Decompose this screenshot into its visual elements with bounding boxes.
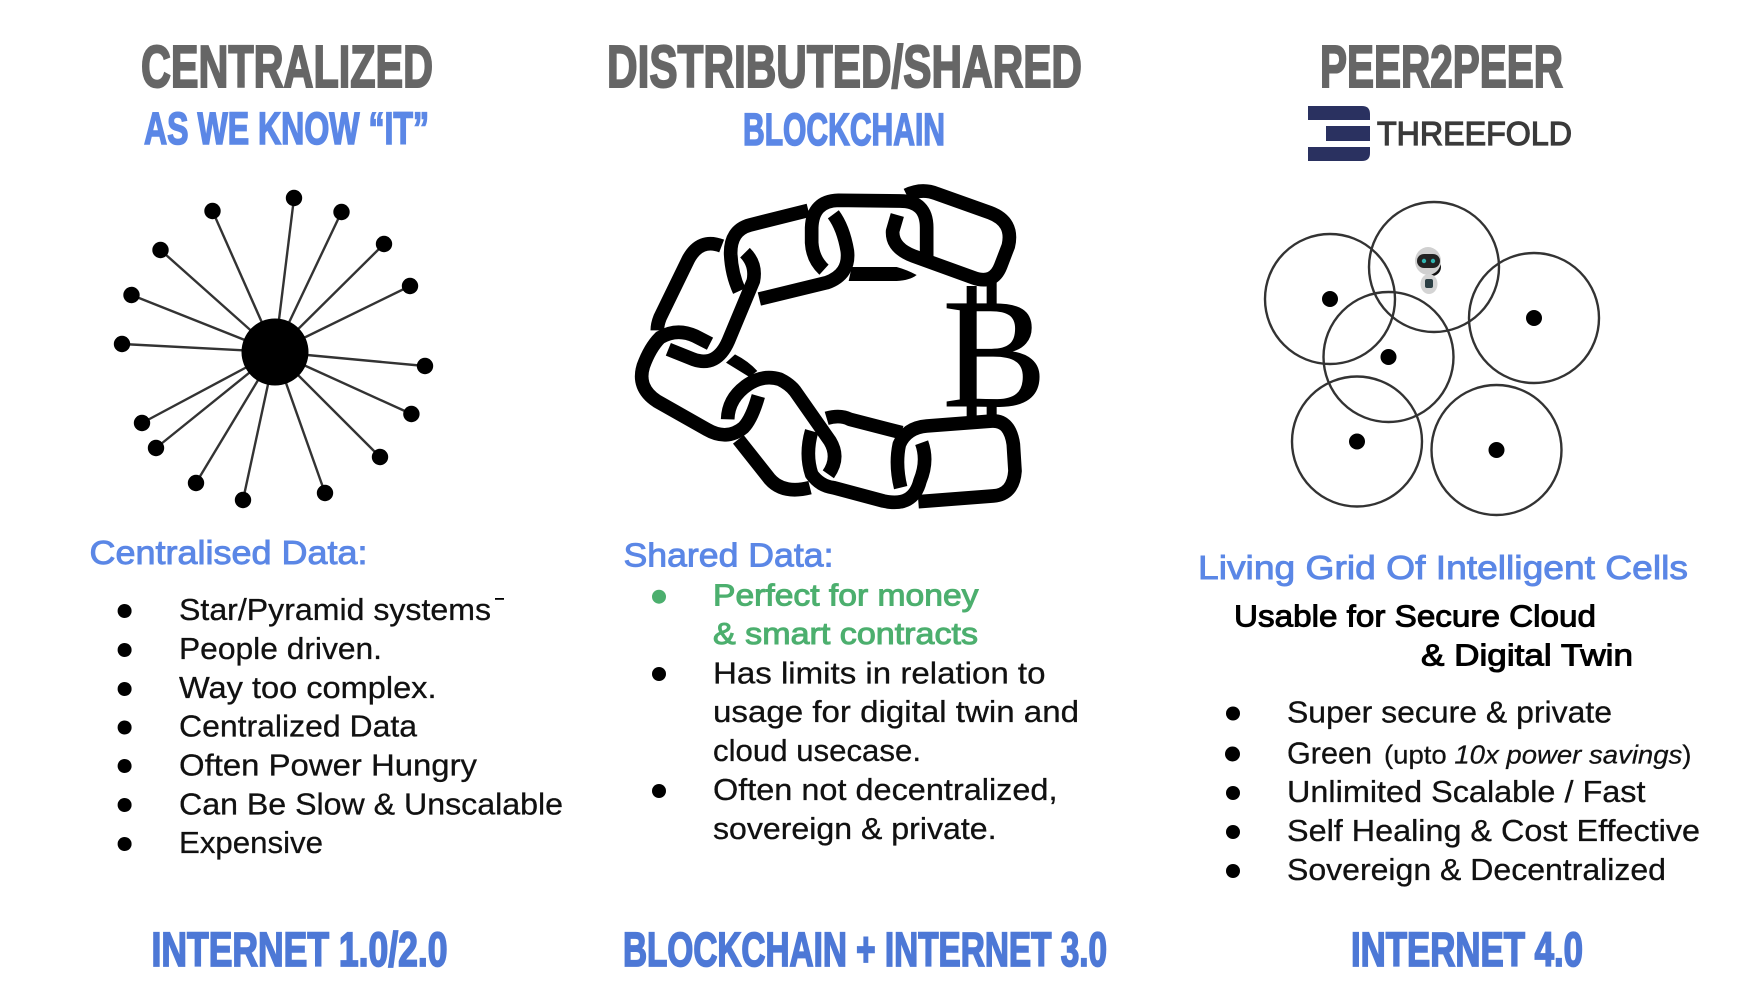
bullet list: centralised data: Star/Pyramid systems — [179, 592, 491, 627]
heading: centralized: CENTRALIZED — [141, 34, 433, 100]
bullet list: peer2peer benefits: Green — [1287, 736, 1372, 770]
bullet list: shared data: Has limits in relation to — [713, 656, 1046, 690]
section heading: shared data: Shared Data: — [624, 536, 834, 574]
bullet list: centralised data: People driven. — [179, 631, 382, 666]
bullet list: centralised data: Often Power Hungry — [179, 748, 478, 782]
bullet list: peer2peer benefits — [1225, 694, 1700, 887]
panel: distributed/shared — [607, 34, 1107, 977]
callout: usable for secure cloud and digital twin — [1234, 598, 1633, 672]
section heading: centralised data: Centralised Data: — [90, 534, 368, 571]
icon: robot digital twin — [1415, 247, 1441, 294]
section heading: living grid: Living Grid Of Intelligent Cells — [1198, 549, 1688, 586]
callout: usable for secure cloud and digital twin: Usable for Secure Cloud — [1234, 598, 1596, 634]
bullet list: centralised data — [118, 592, 563, 860]
bullet list: shared data — [652, 578, 1079, 846]
heading: distributed/shared: DISTRIBUTED/SHARED — [607, 34, 1082, 100]
panel: centralized — [90, 34, 563, 977]
callout: usable for secure cloud and digital twin: & Digital Twin — [1421, 638, 1633, 672]
bullet list: shared data: Often not decentralized, — [713, 772, 1058, 807]
bullet list: peer2peer benefits: Super secure & private — [1287, 694, 1612, 730]
bullet list: shared data: & smart contracts — [713, 616, 978, 651]
footer label: internet 4.0: INTERNET 4.0 — [1351, 924, 1583, 977]
bullet list: centralised data: Way too complex. — [179, 670, 436, 705]
bullet list: peer2peer benefits: Unlimited Scalable / Fast — [1287, 774, 1646, 809]
bullet list: centralised data: Can Be Slow & Unscalable — [179, 786, 563, 822]
subheading: as we know it: AS WE KNOW “IT” — [144, 103, 429, 154]
heading: peer2peer: PEER2PEER — [1320, 34, 1563, 100]
footer label: internet 1.0/2.0: INTERNET 1.0/2.0 — [152, 924, 448, 977]
bullet list: shared data: Perfect for money — [713, 578, 979, 612]
icon: bitcoin symbol: B — [943, 267, 1047, 440]
bullet list: peer2peer benefits: Self Healing & Cost Effective — [1287, 813, 1700, 848]
footer label: blockchain + internet 3.0: BLOCKCHAIN + INTERNET 3.0 — [623, 924, 1107, 977]
icon: bitcoin chain — [642, 191, 1047, 502]
chart: star network — [114, 190, 433, 508]
logo: threefold — [1308, 106, 1572, 161]
subheading: blockchain: BLOCKCHAIN — [743, 104, 945, 155]
bullet list: shared data: usage for digital twin and — [713, 694, 1079, 729]
bullet list: centralised data: Centralized Data — [179, 708, 418, 744]
diagram: living grid of cells — [1265, 202, 1599, 515]
bullet list: shared data: sovereign & private. — [713, 811, 996, 846]
bullet list: peer2peer benefits: Sovereign & Decentralized — [1287, 852, 1666, 887]
logo: threefold: THREEFOLD — [1377, 115, 1572, 152]
bullet list: peer2peer benefits: (upto 10x power savings ) — [1384, 740, 1692, 770]
bullet list: shared data: cloud usecase. — [713, 733, 921, 768]
panel: peer2peer — [1198, 34, 1700, 977]
bullet list: centralised data: Expensive — [179, 825, 323, 860]
